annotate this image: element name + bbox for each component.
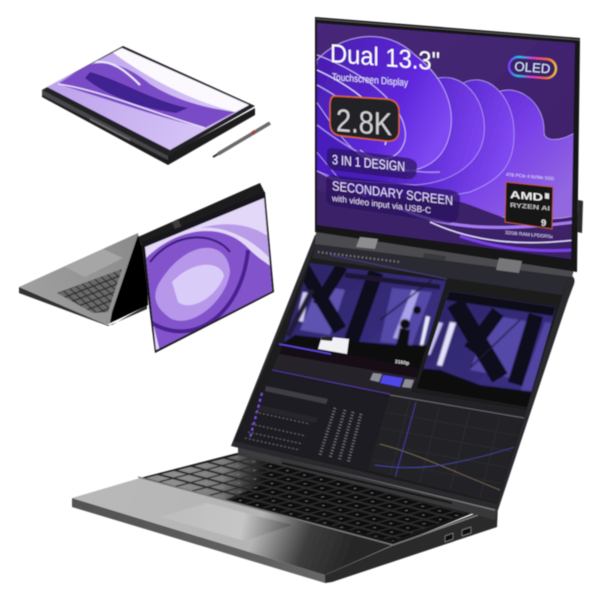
top screen side tab — [577, 200, 583, 233]
deck trim line — [138, 477, 498, 545]
middle screen chassis — [231, 235, 574, 510]
base side edge — [19, 287, 147, 326]
badge: AMD Ryzen AI 9: AMD — [510, 189, 544, 204]
wallpaper main lobe — [315, 36, 451, 171]
keyboard deck right side wall — [325, 505, 498, 583]
video editor: layer list — [234, 372, 388, 470]
video editor: comment input bar — [272, 354, 417, 398]
keyboard keys — [146, 455, 466, 541]
lower hinge bar — [238, 440, 498, 520]
palm rest surface — [72, 478, 393, 575]
wallpaper inner folds — [317, 55, 440, 172]
hinge details — [42, 90, 168, 160]
top screen body — [315, 17, 580, 272]
video editor: comment popup — [318, 336, 349, 354]
tablet screen bezel — [42, 46, 255, 156]
badge: OLED — [508, 56, 557, 79]
wallpaper — [315, 20, 577, 262]
badge: 2.8K: 2.8K — [336, 102, 393, 143]
video editor: progress bar — [279, 344, 331, 354]
keyboard well — [140, 453, 473, 546]
keyboard left lit keys — [146, 454, 268, 500]
video editor: timeline ruler — [389, 389, 527, 421]
tent trackpad — [65, 249, 123, 277]
feature: secondary screen: SECONDARY SCREEN — [332, 178, 453, 208]
right video X girders — [455, 303, 536, 384]
tent hinge bar — [138, 183, 265, 246]
middle screen panel — [234, 245, 568, 504]
deck front edge — [72, 498, 325, 583]
video editor: keyframe graph — [368, 397, 522, 503]
wallpaper far lobe — [315, 90, 576, 222]
video editor: action buttons — [370, 373, 414, 388]
video editor: right video — [418, 290, 556, 406]
top screen top edge highlight — [316, 19, 580, 40]
tablet wallpaper — [46, 47, 250, 151]
tent wallpaper — [144, 197, 273, 351]
tent keyboard — [57, 269, 122, 313]
wallpaper lower dark band — [315, 190, 575, 262]
video editor: left video — [280, 262, 446, 376]
left video light shafts — [296, 285, 432, 346]
video editor: menu bar — [318, 252, 400, 262]
upper hinges — [356, 237, 522, 273]
spec: RAM: 32GB RAM LPDDR5x — [505, 230, 554, 240]
tent keyboard base — [19, 233, 147, 325]
tent screen bezel — [141, 192, 274, 353]
touchpad — [160, 503, 292, 541]
USB ports — [445, 527, 471, 542]
hinge band — [315, 232, 575, 277]
left video ground and figure — [280, 305, 428, 378]
badge: OLED: OLED — [514, 59, 551, 76]
feature: secondary screen: with video input via USB-C — [331, 193, 431, 215]
heading: Dual 13.3": Dual 13.3" — [330, 38, 440, 76]
wallpaper lobe 3 — [315, 80, 514, 205]
illustration: tablet mode device — [40, 40, 270, 165]
feature: 3 in 1 design: 3 IN 1 DESIGN — [332, 152, 405, 174]
badge: AMD Ryzen AI 9: RYZEN AI — [510, 202, 550, 213]
subheading: touchscreen display: Touchscreen Display — [332, 72, 408, 89]
tent inner black — [110, 235, 148, 323]
video editor: quality label: 2160p — [395, 359, 409, 367]
badge: AMD Ryzen AI 9: 9 — [541, 218, 546, 229]
right video ground — [416, 368, 532, 408]
feature: secondary screen — [326, 175, 460, 223]
stylus — [213, 123, 270, 157]
left video X girders — [288, 266, 440, 342]
wallpaper bright wave lines — [400, 208, 575, 251]
device base edge — [42, 90, 255, 165]
editor menu band — [312, 245, 568, 295]
badge: AMD Ryzen AI 9 — [505, 182, 553, 229]
wallpaper lobe 2 — [315, 77, 484, 185]
feature: 3 in 1 design — [327, 148, 417, 179]
video editor: playback controls strip — [280, 342, 418, 378]
video editor: title line — [330, 255, 447, 279]
right video light shafts — [425, 315, 555, 395]
illustration: tent mode device — [19, 183, 280, 360]
spec: SSD: 4TB PCIe 4 NVMe SSD — [506, 172, 555, 182]
